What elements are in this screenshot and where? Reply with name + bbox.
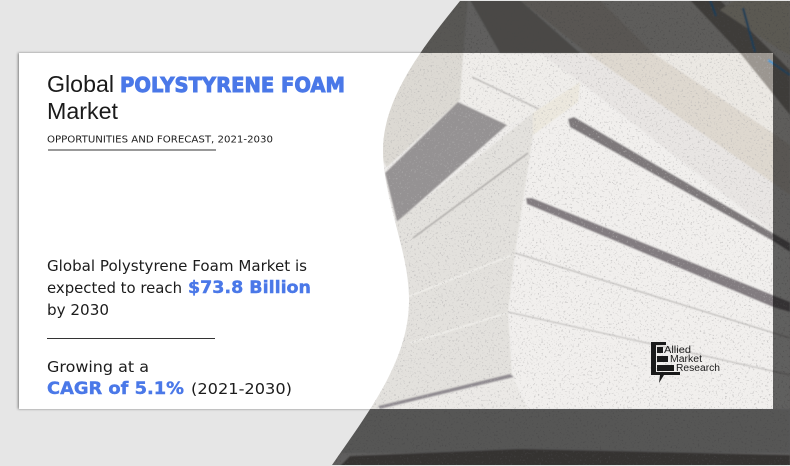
text block: market size: by 2030 <box>47 301 109 319</box>
logo: Allied Market Research <box>651 342 720 383</box>
upper slab front <box>460 0 590 125</box>
upper-right textured board <box>600 0 790 145</box>
text block: growth rate: CAGR of 5.1% <box>47 379 184 399</box>
text block: growth rate <box>47 358 292 399</box>
text block: growth rate: Growing at a <box>47 358 149 376</box>
text block: market size: Global Polystyrene Foam Market is <box>47 257 307 275</box>
lower block left face <box>370 114 533 409</box>
blue print on wrapping <box>743 8 755 52</box>
panel: white text card <box>19 53 773 409</box>
upper slab side <box>383 1 467 166</box>
photo: stacked polystyrene foam boards <box>330 0 790 466</box>
lower strip below card <box>330 409 790 453</box>
logo: Allied Market Research: Allied <box>664 345 691 356</box>
white bottom wedge <box>370 375 528 420</box>
light band between boards <box>540 53 790 245</box>
lower block top chamfer <box>533 82 580 135</box>
subtitle underline <box>48 150 216 151</box>
text block: market size <box>47 257 311 319</box>
logo: Allied Market Research: Market <box>670 354 702 365</box>
title: Global <box>47 71 114 97</box>
subtitle: OPPORTUNITIES AND FORECAST, 2021-2030 <box>47 134 273 146</box>
dark overlay outside card <box>330 0 790 466</box>
lower block right face <box>505 82 790 466</box>
title: Market <box>47 98 119 124</box>
cream board <box>520 0 790 195</box>
title <box>47 71 345 124</box>
upper slab underside <box>385 102 507 222</box>
title: POLYSTYRENE FOAM <box>120 73 345 97</box>
foam texture <box>330 0 790 466</box>
text block: market size: expected to reach <box>47 279 182 297</box>
text block: market size: $73.8 Billion <box>188 278 311 298</box>
grooves <box>568 117 790 252</box>
divider <box>47 338 215 339</box>
logo: Allied Market Research: Research <box>676 363 720 374</box>
text block: growth rate: (2021-2030) <box>191 380 292 398</box>
